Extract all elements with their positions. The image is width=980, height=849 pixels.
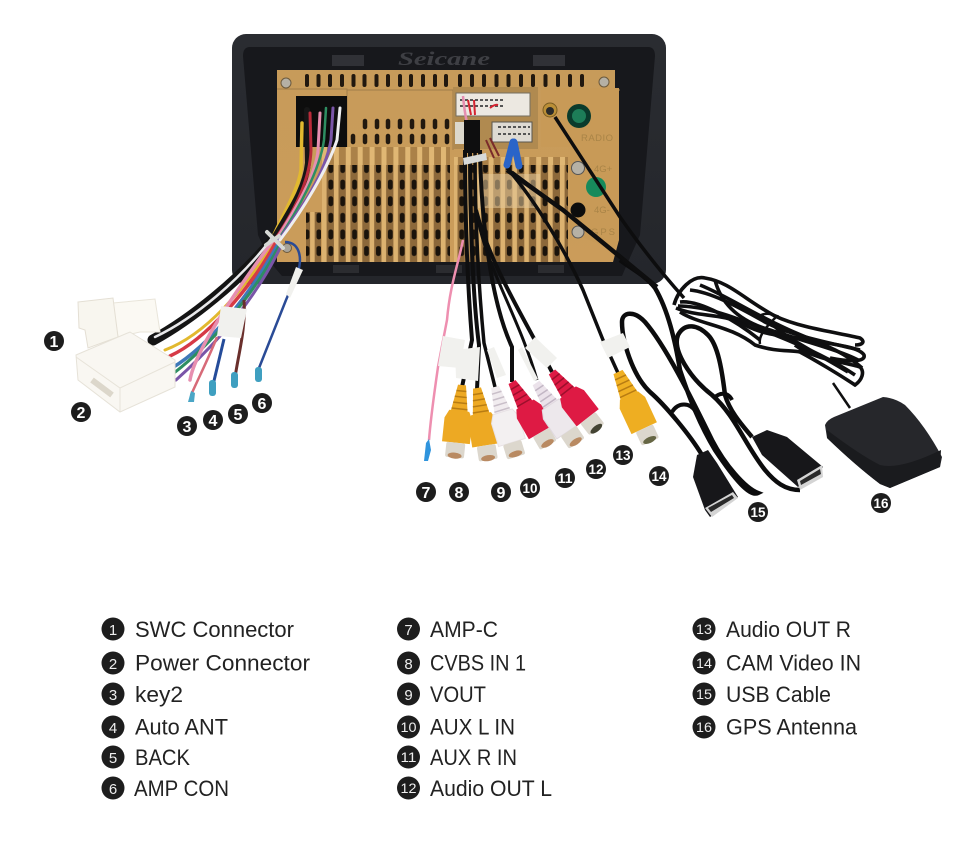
callout 4: 4 bbox=[209, 413, 218, 430]
item 5 bbox=[102, 745, 190, 770]
USB cables bbox=[620, 260, 800, 494]
callout 1 bbox=[44, 331, 64, 351]
clips bbox=[332, 55, 565, 66]
item 11: AUX R IN bbox=[430, 745, 517, 770]
outer frame bbox=[232, 34, 666, 284]
wire 7: AMP-C bbox=[429, 240, 463, 440]
item 3: 3 bbox=[109, 687, 117, 704]
left power socket bbox=[296, 96, 347, 147]
translucent sticker bbox=[478, 174, 540, 208]
connector 1: SWC bbox=[78, 298, 160, 348]
callout 3 bbox=[177, 416, 197, 436]
legend column 1 bbox=[102, 617, 310, 801]
item 7: AMP-C bbox=[430, 617, 498, 642]
right antenna panel: GPS bbox=[591, 227, 615, 238]
callout 5: 5 bbox=[234, 407, 243, 424]
callout 14: 14 bbox=[652, 468, 667, 484]
item 16: GPS Antenna bbox=[726, 714, 858, 740]
callout 8: 8 bbox=[455, 485, 464, 502]
USB plug right bbox=[752, 430, 823, 490]
USB plug left bbox=[693, 450, 738, 517]
item 2: Power Connector bbox=[135, 650, 310, 676]
item 9: 9 bbox=[404, 687, 413, 704]
white sockets bbox=[455, 93, 532, 158]
item 10: 10 bbox=[400, 719, 417, 735]
item 1: 1 bbox=[109, 622, 117, 639]
short signal wires bbox=[191, 240, 463, 440]
connector 2: Power bbox=[76, 332, 175, 412]
gold back plate bbox=[277, 70, 620, 262]
item 10 bbox=[397, 714, 515, 740]
wrapped trunk bbox=[464, 120, 480, 153]
RCA connector 8: CVBS bbox=[440, 384, 476, 460]
wire labels bbox=[217, 267, 630, 381]
inner bezel bbox=[243, 47, 655, 276]
head unit rear view bbox=[232, 34, 666, 284]
callout 16 bbox=[871, 493, 891, 513]
RCA and signal cables bbox=[462, 120, 657, 390]
callout 15 bbox=[748, 502, 768, 522]
wire harness bbox=[153, 108, 340, 380]
RCA connector 11: red bbox=[500, 375, 561, 453]
callout 11 bbox=[555, 468, 575, 488]
item 15: USB Cable bbox=[726, 682, 831, 707]
item 3 bbox=[102, 682, 183, 707]
item 14: CAM Video IN bbox=[726, 650, 861, 676]
wire terminals bbox=[188, 367, 431, 461]
right antenna panel bbox=[541, 88, 619, 250]
item 7 bbox=[397, 617, 498, 642]
RCA connector 14: camera bbox=[605, 366, 664, 449]
item 6: 6 bbox=[109, 781, 117, 798]
wire 5: back bbox=[235, 300, 244, 378]
item 8 bbox=[397, 650, 526, 676]
callout 6: 6 bbox=[258, 396, 267, 413]
item 14: 14 bbox=[696, 655, 712, 671]
cable tie bbox=[266, 232, 283, 248]
callout 2 bbox=[71, 402, 91, 422]
callout 12: 12 bbox=[588, 461, 604, 477]
right antenna panel: 4G+ bbox=[594, 164, 613, 175]
ventilation grille bbox=[322, 147, 450, 262]
item 6: AMP CON bbox=[134, 776, 229, 801]
item 9: VOUT bbox=[430, 682, 486, 707]
callout 6 bbox=[252, 393, 272, 413]
callout 10 bbox=[520, 478, 540, 498]
zip tie and connector wrap bbox=[463, 142, 519, 166]
GPS antenna puck bbox=[825, 397, 942, 488]
callout 9: 9 bbox=[497, 485, 506, 502]
callout 11: 11 bbox=[558, 470, 573, 486]
RCA connector 10: white bbox=[482, 383, 530, 461]
item 11 bbox=[397, 745, 517, 770]
callout 16: 16 bbox=[874, 495, 889, 511]
callout 7: 7 bbox=[422, 485, 431, 502]
item 3: key2 bbox=[135, 682, 183, 707]
callout 8 bbox=[449, 482, 469, 502]
item 13: Audio OUT R bbox=[726, 617, 851, 642]
item 5: BACK bbox=[135, 745, 190, 770]
callout 12 bbox=[586, 459, 606, 479]
GPS antenna cable bbox=[555, 117, 684, 298]
plate seams bbox=[277, 89, 620, 150]
item 7: 7 bbox=[404, 622, 413, 639]
callout 7 bbox=[416, 482, 436, 502]
item 10: AUX L IN bbox=[430, 714, 515, 740]
cable one bbox=[620, 260, 758, 494]
item 4: 4 bbox=[109, 720, 117, 737]
RCA connector 13: red bbox=[541, 363, 609, 440]
callout 1: 1 bbox=[50, 334, 59, 351]
item 15: 15 bbox=[696, 686, 712, 702]
top vents bbox=[307, 76, 582, 85]
callout 3: 3 bbox=[183, 419, 192, 436]
center vents bbox=[353, 121, 447, 142]
diagram callout numbers bbox=[44, 331, 891, 522]
item 8: 8 bbox=[404, 656, 413, 673]
callout 5 bbox=[228, 404, 248, 424]
cable two bbox=[677, 326, 800, 490]
callout 14 bbox=[649, 466, 669, 486]
legend column 2 bbox=[397, 617, 552, 801]
item 11: 11 bbox=[400, 749, 417, 765]
item 2: 2 bbox=[109, 656, 117, 673]
callout 13: 13 bbox=[616, 447, 631, 463]
callout 4 bbox=[203, 410, 223, 430]
item 13: 13 bbox=[696, 621, 712, 637]
callout 10: 10 bbox=[522, 480, 538, 496]
cable ties bbox=[672, 394, 732, 412]
callout 2: 2 bbox=[77, 405, 86, 422]
wire 4: auto antenna bbox=[213, 339, 224, 385]
RCA connector 12: white bbox=[524, 375, 589, 452]
wire 6: amp con bbox=[259, 242, 300, 368]
right antenna panel: RADIO bbox=[581, 133, 613, 144]
RCA connector 9: VOUT bbox=[463, 386, 502, 463]
coiled GPS cable bbox=[674, 278, 864, 408]
item 16: 16 bbox=[696, 719, 712, 735]
item 5: 5 bbox=[109, 750, 117, 767]
right antenna panel: 4G- bbox=[594, 205, 610, 216]
item 9 bbox=[397, 682, 486, 707]
callout 13 bbox=[613, 445, 633, 465]
item 12: 12 bbox=[400, 780, 417, 796]
screws bbox=[281, 78, 291, 88]
item 4: Auto ANT bbox=[135, 714, 228, 740]
callout 15: 15 bbox=[750, 504, 766, 520]
legend column 3 bbox=[692, 617, 861, 740]
item 12: Audio OUT L bbox=[430, 776, 552, 801]
socket recess bbox=[453, 87, 538, 149]
callout 9 bbox=[491, 482, 511, 502]
brand logo: Seicane bbox=[398, 49, 491, 70]
wire 3: key2 bbox=[191, 337, 217, 395]
item 1: SWC Connector bbox=[135, 617, 294, 642]
item 8: CVBS IN 1 bbox=[430, 650, 526, 676]
